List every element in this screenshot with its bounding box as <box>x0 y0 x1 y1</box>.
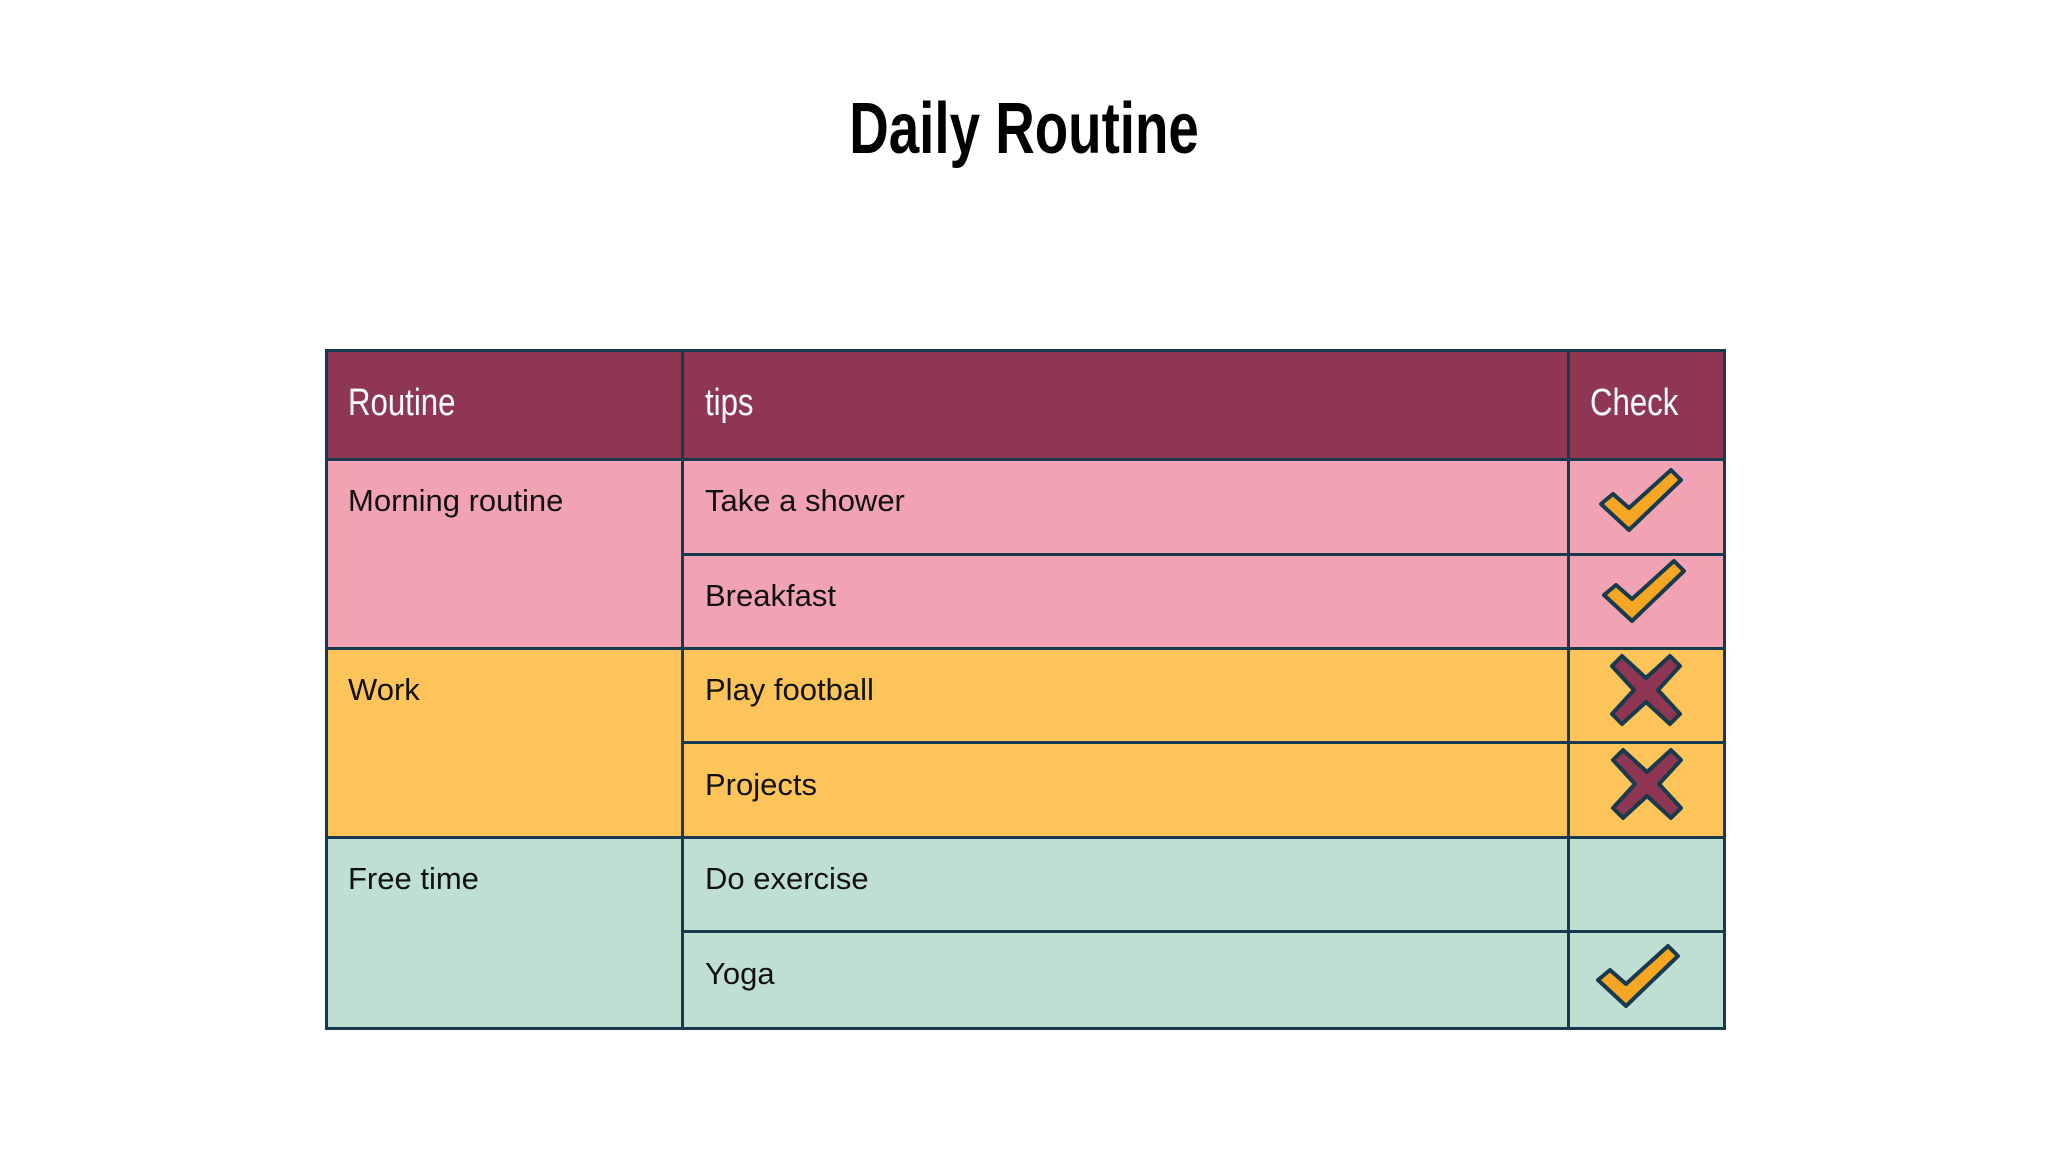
table: Free time <box>348 861 479 896</box>
table: Yoga <box>705 956 775 991</box>
table: Do exercise <box>705 861 869 896</box>
labels: Morning routine <box>348 483 563 518</box>
group: morning <box>325 458 684 650</box>
group: free time <box>325 836 684 1030</box>
title: Daily Routine <box>849 89 1199 169</box>
icon: check 2 <box>1602 558 1686 624</box>
header: Check: Check <box>1590 382 1678 424</box>
icon: check 1 <box>1598 468 1684 532</box>
table: Play football <box>705 672 874 707</box>
header: Routine: Routine <box>348 382 455 424</box>
table: Take a shower <box>705 483 905 518</box>
icon: check 3 <box>1596 944 1680 1008</box>
header row <box>325 349 684 461</box>
table: Work <box>348 672 420 707</box>
table: Breakfast <box>705 578 836 613</box>
header: tips: tips <box>705 382 753 424</box>
icon: cross 2 <box>1610 748 1684 820</box>
table: Projects <box>705 767 817 802</box>
table <box>325 349 1723 1027</box>
icon: cross 1 <box>1610 654 1682 726</box>
group: work <box>325 647 684 839</box>
